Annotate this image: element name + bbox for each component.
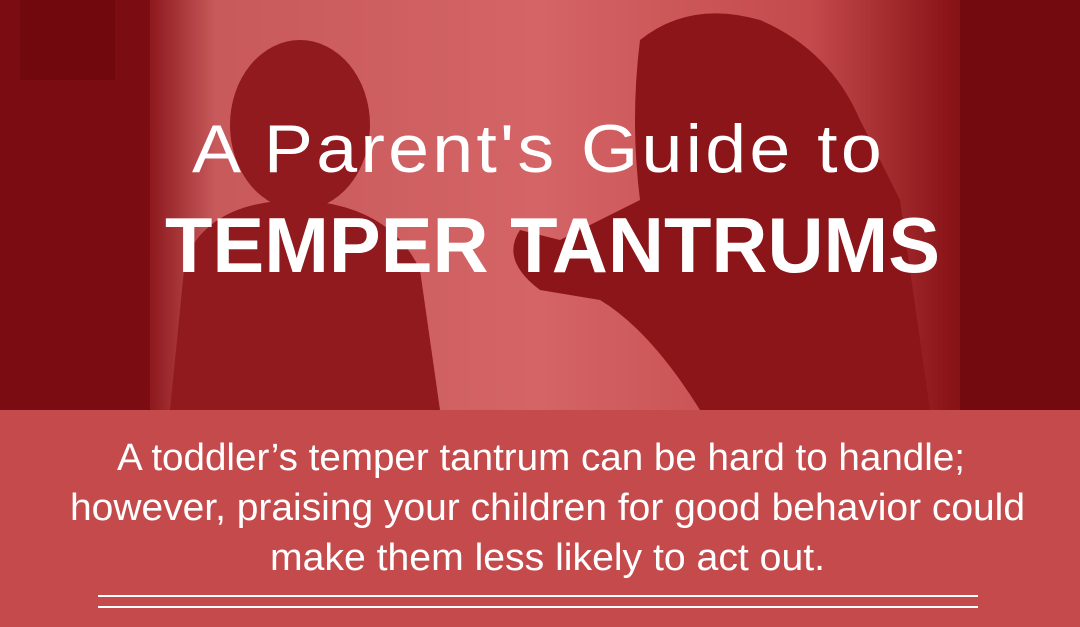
intro text: A toddler’s temper tantrum can be hard to handle; <box>117 437 965 479</box>
silhouette: child <box>170 40 440 410</box>
title: A Parent's Guide to <box>192 111 885 187</box>
intro text <box>70 437 1025 579</box>
intro panel <box>0 410 1080 627</box>
silhouette: adult <box>513 13 930 410</box>
photo header <box>0 0 1080 410</box>
intro text: make them less likely to act out. <box>270 537 825 579</box>
title <box>165 111 940 289</box>
intro text: however, praising your children for good behavior could <box>70 487 1025 529</box>
title: TEMPER TANTRUMS <box>165 201 940 289</box>
